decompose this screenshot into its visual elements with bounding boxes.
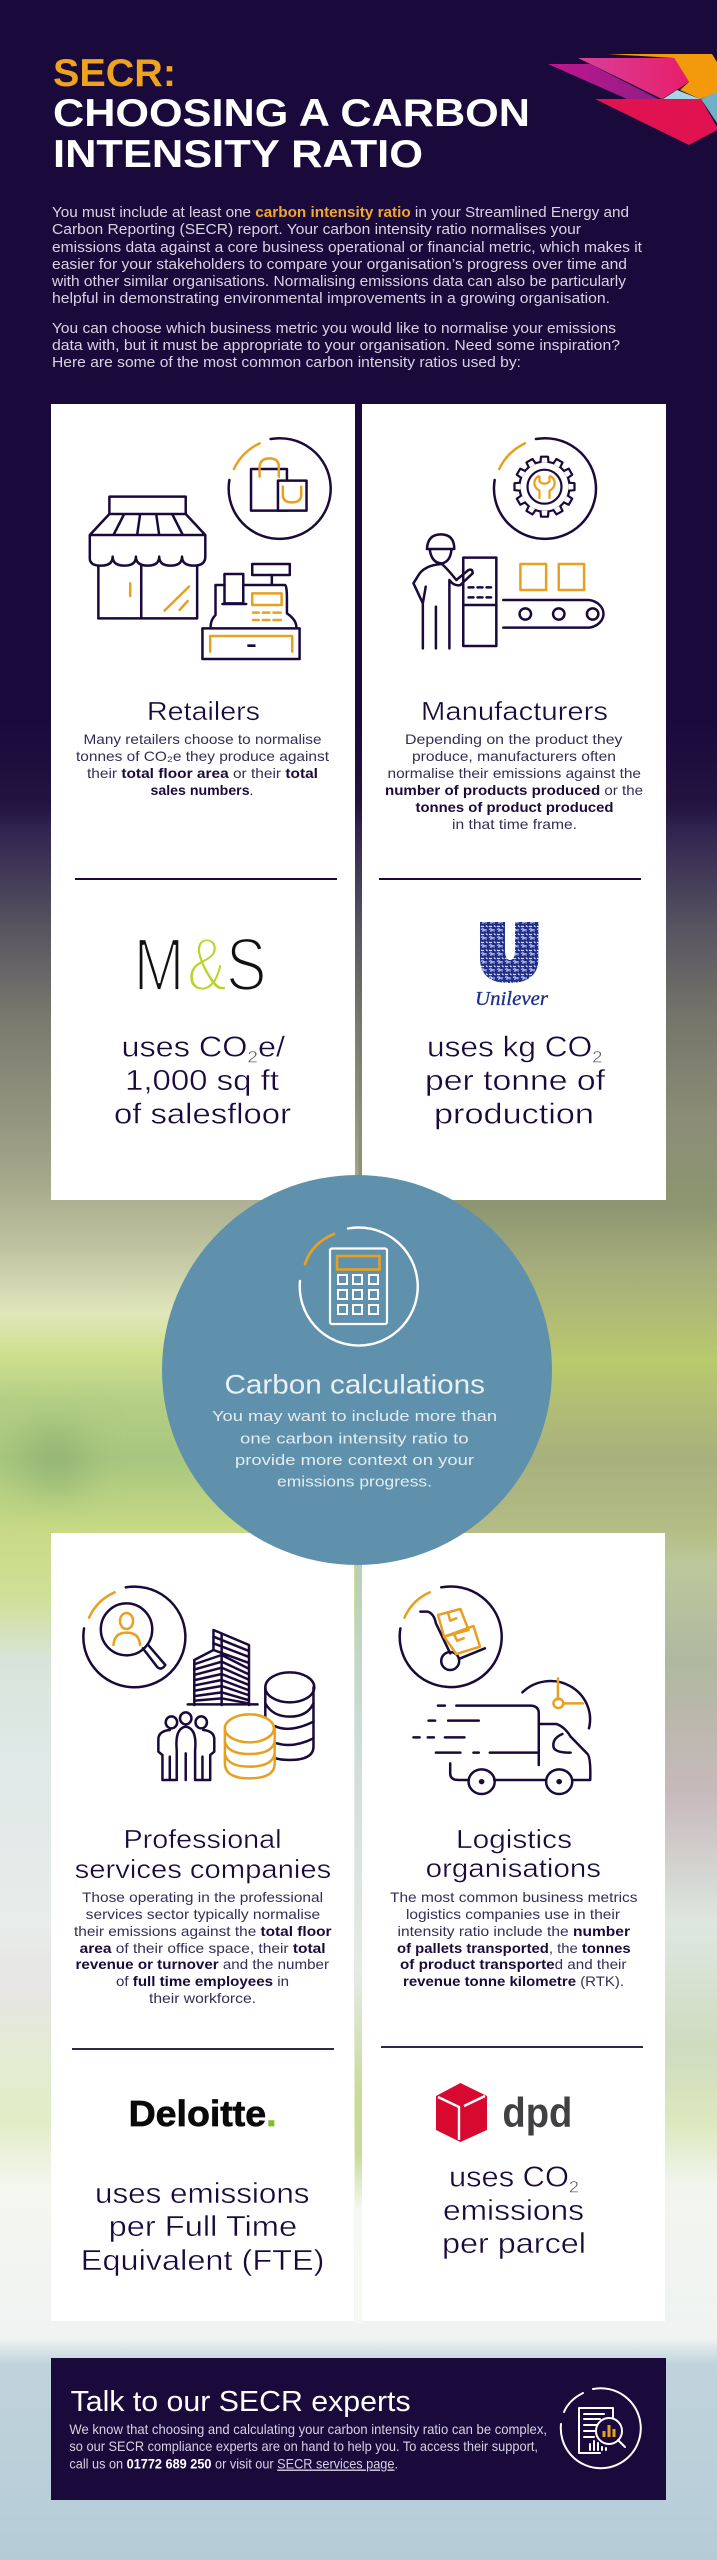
icon: calculator — [300, 1228, 418, 1346]
text: professional services description: area of their office space, their total — [80, 1940, 326, 1956]
text: logistics description: revenue tonne kilometre (RTK). — [403, 1973, 624, 1989]
text: Unilever metric: uses kg CO — [427, 1032, 578, 1064]
text: professional services description: revenue or turnover and the number — [76, 1956, 329, 1972]
panel: retailers — [51, 404, 355, 1200]
brand logo shard graphic — [548, 54, 717, 145]
panel: manufacturers — [362, 404, 666, 1200]
text: manufacturers description — [385, 731, 643, 832]
intro paragraph 1: emissions data against a core business operational or financial metric, which makes it — [52, 240, 642, 256]
logo: M&S: & — [187, 922, 227, 1006]
text: logistics description: The most common business metrics — [390, 1889, 638, 1905]
text: dpd metric: emissions — [443, 2195, 584, 2227]
intro paragraph 1: easier for your stakeholders to compare your organisation’s progress over time and — [52, 257, 627, 273]
title: CHOOSING A CARBON — [53, 92, 530, 135]
logo: M&S: M — [134, 922, 184, 1006]
text: M&S metric: e/ — [258, 1032, 286, 1064]
text: M&S metric: 1,000 sq ft — [125, 1065, 279, 1097]
panel: logistics — [362, 1533, 665, 2321]
logo: Deloitte: Deloitte. — [129, 2093, 277, 2134]
intro paragraph 1: with other similar organisations. Normalising emissions data can also be particularly — [51, 274, 627, 290]
logo: dpd: dpd — [502, 2089, 572, 2136]
text: Deloitte metric: Equivalent (FTE) — [81, 2245, 324, 2277]
text: manufacturers description: normalise their emissions against the — [388, 765, 641, 781]
text: logistics description: of pallets transported , the tonnes — [397, 1940, 631, 1956]
text: dpd metric: per parcel — [442, 2228, 586, 2260]
text: Deloitte metric — [81, 2178, 324, 2277]
text: professional services description: their emissions against the total floor — [74, 1923, 332, 1939]
heading: logistics organisations — [426, 1824, 601, 1883]
intro paragraph 2: Here are some of the most common carbon intensity ratios used by: — [52, 355, 521, 371]
text: M&S metric — [114, 1032, 291, 1130]
text: dpd metric — [442, 2162, 586, 2260]
text: Unilever metric: production — [434, 1098, 594, 1130]
text: contact details — [69, 2421, 547, 2472]
intro paragraph 2: data with, but it must be appropriate to your organisation. Need some inspiration? — [52, 338, 620, 354]
text: carbon calculations description: emissions progress. — [277, 1473, 432, 1490]
panel: talk to our SECR experts — [51, 2358, 666, 2500]
text: logistics description: intensity ratio include the number — [398, 1923, 631, 1939]
heading: professional services companies: Professional — [124, 1824, 282, 1854]
callout: carbon calculations — [162, 1175, 552, 1565]
text: logistics description — [390, 1889, 638, 1989]
logo: M&S — [134, 922, 266, 1006]
text: dpd metric: uses CO — [449, 2162, 562, 2194]
logo: M&S: S — [226, 922, 266, 1006]
panel: professional services — [51, 1533, 354, 2321]
title: INTENSITY RATIO — [53, 133, 423, 176]
text: retailers description: sales numbers. — [150, 782, 254, 798]
heading: logistics organisations: Logistics — [456, 1824, 572, 1854]
text: contact details: so our SECR compliance experts are on hand to help you. To access their support, — [69, 2438, 538, 2454]
text: manufacturers description: number of products produced or the — [385, 782, 643, 798]
intro paragraph 2 — [52, 321, 620, 371]
text: retailers description: tonnes of CO₂e they produce against — [76, 748, 329, 764]
title: SECR: — [53, 52, 176, 95]
text: M&S metric: 2 — [247, 1048, 258, 1066]
heading: talk to our experts: Talk to our SECR experts — [71, 2386, 411, 2418]
text: retailers description: their total floor area or their total — [87, 765, 318, 781]
text: contact details: We know that choosing and calculating your carbon intensity ratio can be complex, — [69, 2421, 547, 2437]
text: retailers description: Many retailers choose to normalise — [84, 731, 322, 747]
text: logistics description: logistics companies use in their — [406, 1906, 620, 1922]
text: M&S metric: uses CO — [122, 1032, 234, 1064]
icon: report under magnifying glass — [561, 2388, 641, 2468]
text: contact details: call us on 01772 689 250 or visit our SECR services page. — [69, 2456, 398, 2472]
text: M&S metric: of salesfloor — [114, 1098, 291, 1130]
heading: retailers: Retailers — [147, 696, 260, 726]
heading: logistics organisations: organisations — [426, 1853, 601, 1883]
heading: professional services companies: services companies — [75, 1854, 331, 1884]
text: dpd metric: 2 — [569, 2178, 579, 2196]
text: manufacturers description: Depending on the product they — [405, 731, 622, 747]
text: Deloitte metric: per Full Time — [109, 2211, 297, 2243]
text: professional services description: Those operating in the professional — [82, 1889, 323, 1905]
text: retailers description — [76, 731, 329, 798]
intro paragraph 2: You can choose which business metric you would like to normalise your emissions — [52, 321, 616, 337]
icon: trolley, clock and van — [400, 1586, 590, 1794]
text: professional services description — [74, 1889, 332, 2006]
text: Unilever metric: 2 — [592, 1048, 602, 1066]
text: manufacturers description: produce, manufacturers often — [412, 748, 616, 764]
intro paragraph 1: helpful in demonstrating environmental improvements in a growing organisation. — [52, 291, 610, 307]
text: carbon calculations description: one carbon intensity ratio to — [240, 1431, 469, 1448]
text: manufacturers description: tonnes of product produced — [416, 799, 614, 815]
text: professional services description: of full time employees in — [116, 1973, 289, 1989]
text: carbon calculations description: provide more context on your — [235, 1452, 474, 1469]
logo: dpd — [436, 2083, 572, 2142]
text: professional services description: their workforce. — [149, 1990, 256, 2006]
logo: Unilever — [475, 922, 548, 1010]
text: carbon calculations description: You may want to include more than — [212, 1408, 497, 1425]
title — [53, 52, 530, 176]
intro paragraph 1 — [51, 205, 642, 307]
heading: carbon calculations: Carbon calculations — [224, 1370, 485, 1400]
text: Deloitte metric: uses emissions — [95, 2178, 310, 2210]
heading: manufacturers: Manufacturers — [421, 696, 608, 726]
logo: Unilever: Unilever — [475, 988, 548, 1010]
text: manufacturers description: in that time frame. — [452, 816, 577, 832]
intro paragraph 1: You must include at least one carbon intensity ratio in your Streamlined Energy and — [52, 205, 629, 221]
icon: shop and till — [90, 438, 331, 659]
icon: worker and conveyor — [413, 438, 603, 648]
icon: search, offices, people and coins — [83, 1587, 314, 1780]
text: logistics description: of product transporte d and their — [400, 1956, 627, 1972]
intro paragraph 1: Carbon Reporting (SECR) report. Your carbon intensity ratio normalises your — [52, 222, 581, 238]
text: professional services description: services sector typically normalise — [86, 1906, 320, 1922]
heading: professional services companies — [75, 1824, 331, 1884]
text: carbon calculations description — [212, 1408, 497, 1490]
text: Unilever metric — [425, 1032, 606, 1130]
text: Unilever metric: per tonne of — [425, 1065, 606, 1097]
